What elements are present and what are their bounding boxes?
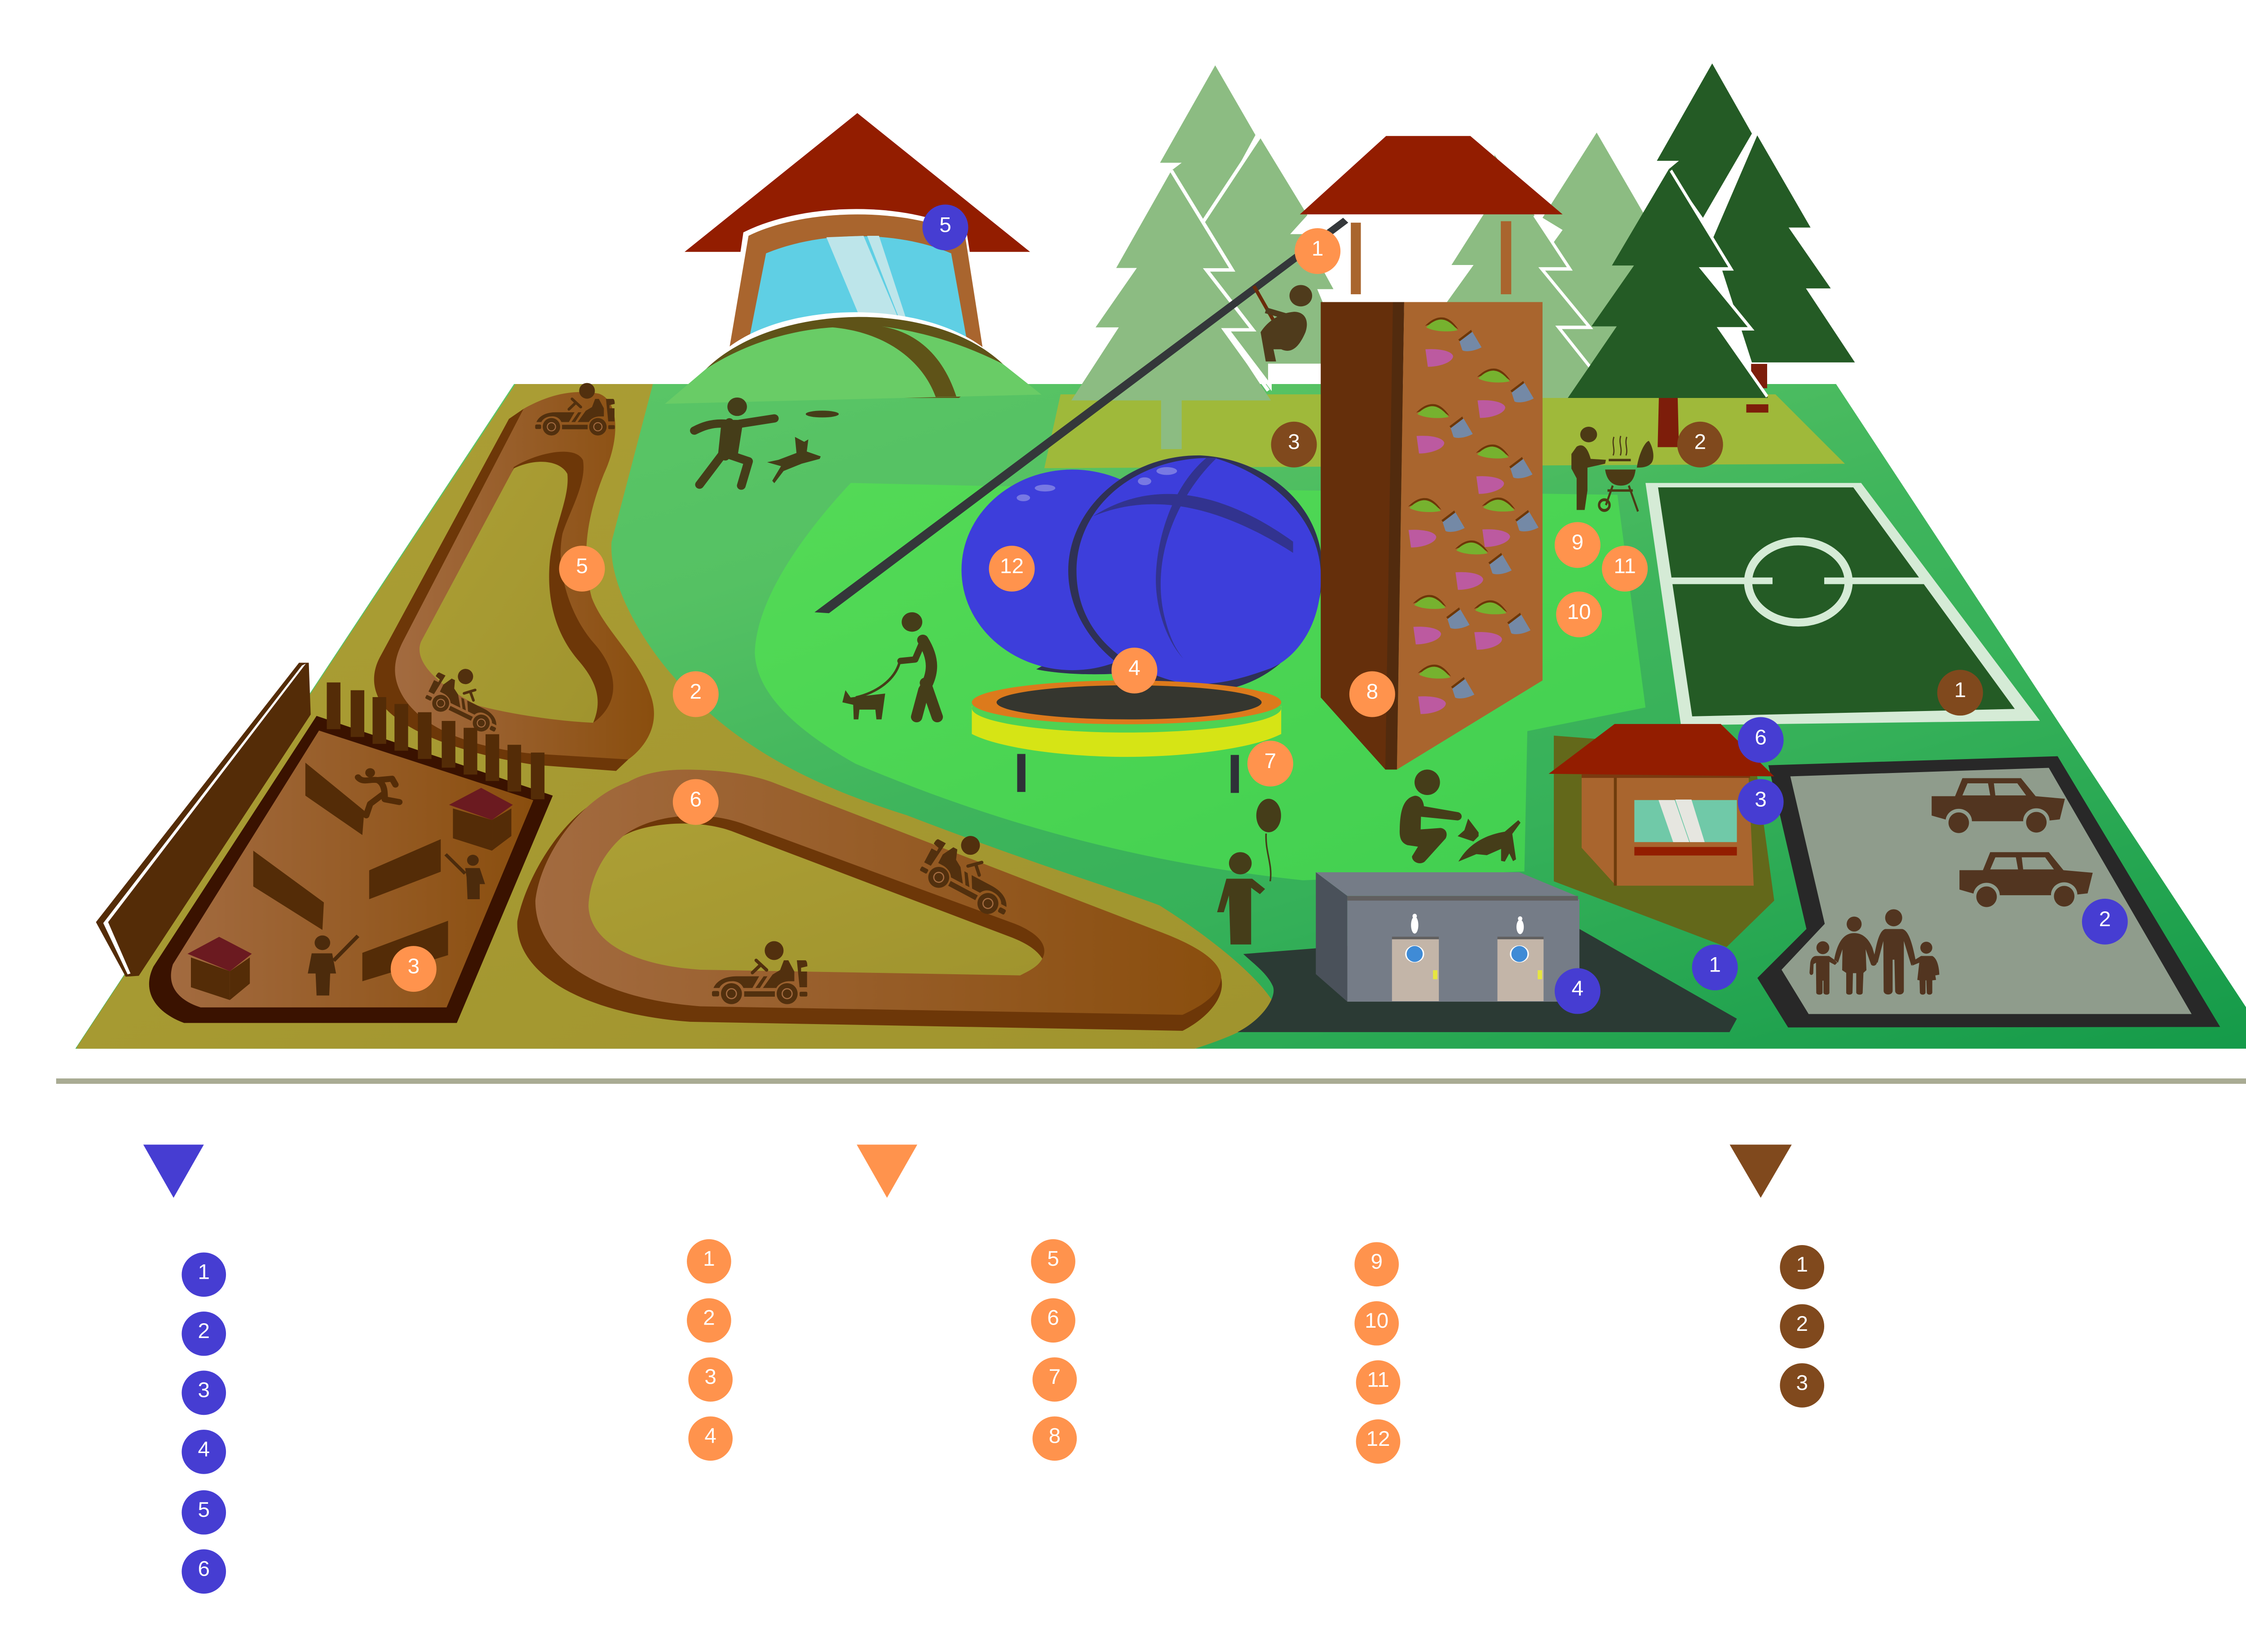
legend: blue column: 4 (198, 1437, 210, 1461)
trees: dark green pines (1568, 63, 1857, 447)
map badges: orange activities: 11 (1614, 554, 1636, 578)
trees: light green forest (1071, 66, 1659, 449)
icon: car (1932, 778, 2065, 834)
legend: orange columns (687, 1144, 1400, 1464)
fence posts (327, 682, 544, 799)
building: hilltop pavilion (665, 113, 1041, 404)
legend: blue column (143, 1144, 226, 1594)
legend: orange columns: 9 (1371, 1250, 1383, 1274)
legend: orange columns: 10 (1365, 1309, 1388, 1333)
map badges: orange activities: 3 (407, 954, 420, 978)
obstacles (253, 763, 448, 981)
climbing tower (1300, 136, 1563, 769)
legend: brown column: 1 (1796, 1253, 1808, 1277)
go-kart track: upper (374, 392, 654, 771)
map badges: blue facilities: 3 (1755, 787, 1767, 811)
icon: person walking dog (842, 612, 937, 720)
area: lime strip (1044, 394, 1845, 468)
icon: go-kart left (422, 658, 514, 738)
legend: orange columns: 1 (703, 1247, 715, 1271)
legend: orange columns: 2 (703, 1306, 715, 1330)
icon: person throwing frisbee with dog (694, 398, 839, 486)
go-kart track: lower (517, 770, 1222, 1031)
icon: hut right (449, 788, 513, 851)
legend: blue column: 1 (198, 1260, 210, 1284)
legend: orange columns: 8 (1049, 1424, 1061, 1448)
icon: runner (358, 768, 399, 815)
parking lot (1757, 756, 2220, 1028)
area: olive karting ground (77, 384, 1272, 1049)
map badges: brown outdoor areas: 2 (1694, 430, 1706, 454)
map: ground plane and all park areas (75, 63, 2246, 1049)
area: bright green lawn (755, 483, 1645, 880)
map badges: brown outdoor areas: 1 (1954, 678, 1966, 702)
kiosk (1549, 724, 1774, 947)
map badges: orange activities: 5 (576, 554, 588, 578)
map badges: orange activities: 10 (1567, 600, 1591, 624)
toilet block (1238, 872, 1737, 1032)
football pitch (1645, 483, 2040, 725)
legend: brown column: 3 (1796, 1371, 1808, 1395)
paintball wall (96, 663, 311, 976)
legend: orange columns: 3 (704, 1365, 716, 1389)
divider line (56, 1078, 2246, 1084)
map badges: orange activities: 7 (1264, 749, 1276, 773)
legend: orange columns: 4 (704, 1424, 716, 1448)
icon: second car (1959, 852, 2093, 908)
map badges: brown outdoor areas: 3 (1288, 430, 1300, 454)
paintball field (149, 682, 553, 1023)
map badges: orange activities: 2 (690, 680, 702, 703)
icon: person at barbecue grill (1571, 427, 1654, 512)
icon: person holding balloon (1217, 799, 1281, 945)
icon: go-kart on slope (916, 822, 1030, 922)
marker: brown triangle (1730, 1144, 1792, 1198)
ground: green base (75, 384, 2246, 1049)
map badges: orange activities: 9 (1572, 530, 1583, 554)
map badges: blue facilities: 5 (939, 213, 951, 237)
map badges: brown outdoor areas (1271, 422, 1983, 716)
map badges: orange activities: 1 (1312, 237, 1323, 261)
legend: orange columns: 7 (1049, 1365, 1061, 1389)
legend: blue column: 6 (198, 1557, 210, 1581)
marker: orange triangle (857, 1144, 917, 1198)
climbing holds (1408, 318, 1539, 714)
marker: blue triangle (143, 1144, 204, 1198)
icon: person on zipline (1254, 285, 1312, 362)
map badges: orange activities: 4 (1128, 656, 1141, 680)
legend: blue column: 5 (198, 1498, 210, 1522)
map badges: blue facilities: 2 (2099, 907, 2111, 931)
icon: paintball player centre (308, 936, 358, 995)
icon: family of four (1809, 909, 1939, 994)
legend: orange columns: 11 (1367, 1368, 1389, 1392)
legend: orange columns: 12 (1366, 1427, 1390, 1451)
map badges: orange activities: 6 (690, 787, 702, 811)
legend: orange columns: 5 (1047, 1247, 1059, 1271)
map badges: blue facilities (923, 204, 2128, 1014)
map badges: blue facilities: 6 (1755, 725, 1767, 749)
legend: brown column: 2 (1796, 1312, 1808, 1336)
icon: hut left (187, 937, 252, 1000)
legend: brown column (1730, 1144, 1824, 1408)
trampoline (972, 680, 1281, 793)
zipline cable (814, 218, 1348, 613)
hill (665, 327, 1041, 404)
map badges: blue facilities: 1 (1709, 953, 1721, 977)
map badges: orange activities: 12 (1000, 554, 1024, 578)
icon: crouching person with dog (1400, 769, 1521, 863)
inflatable: blue balls (961, 455, 1322, 692)
icon: go-kart top (535, 383, 615, 436)
legend: orange columns: 6 (1047, 1306, 1059, 1330)
legend: blue column: 2 (198, 1319, 210, 1343)
map badges: blue facilities: 4 (1572, 976, 1583, 1000)
legend: blue column: 3 (198, 1378, 210, 1402)
map badges: orange activities (391, 228, 1648, 992)
icon: go-kart bottom (712, 941, 807, 1004)
map badges: orange activities: 8 (1366, 680, 1378, 703)
icon: paintball player right (446, 854, 485, 899)
